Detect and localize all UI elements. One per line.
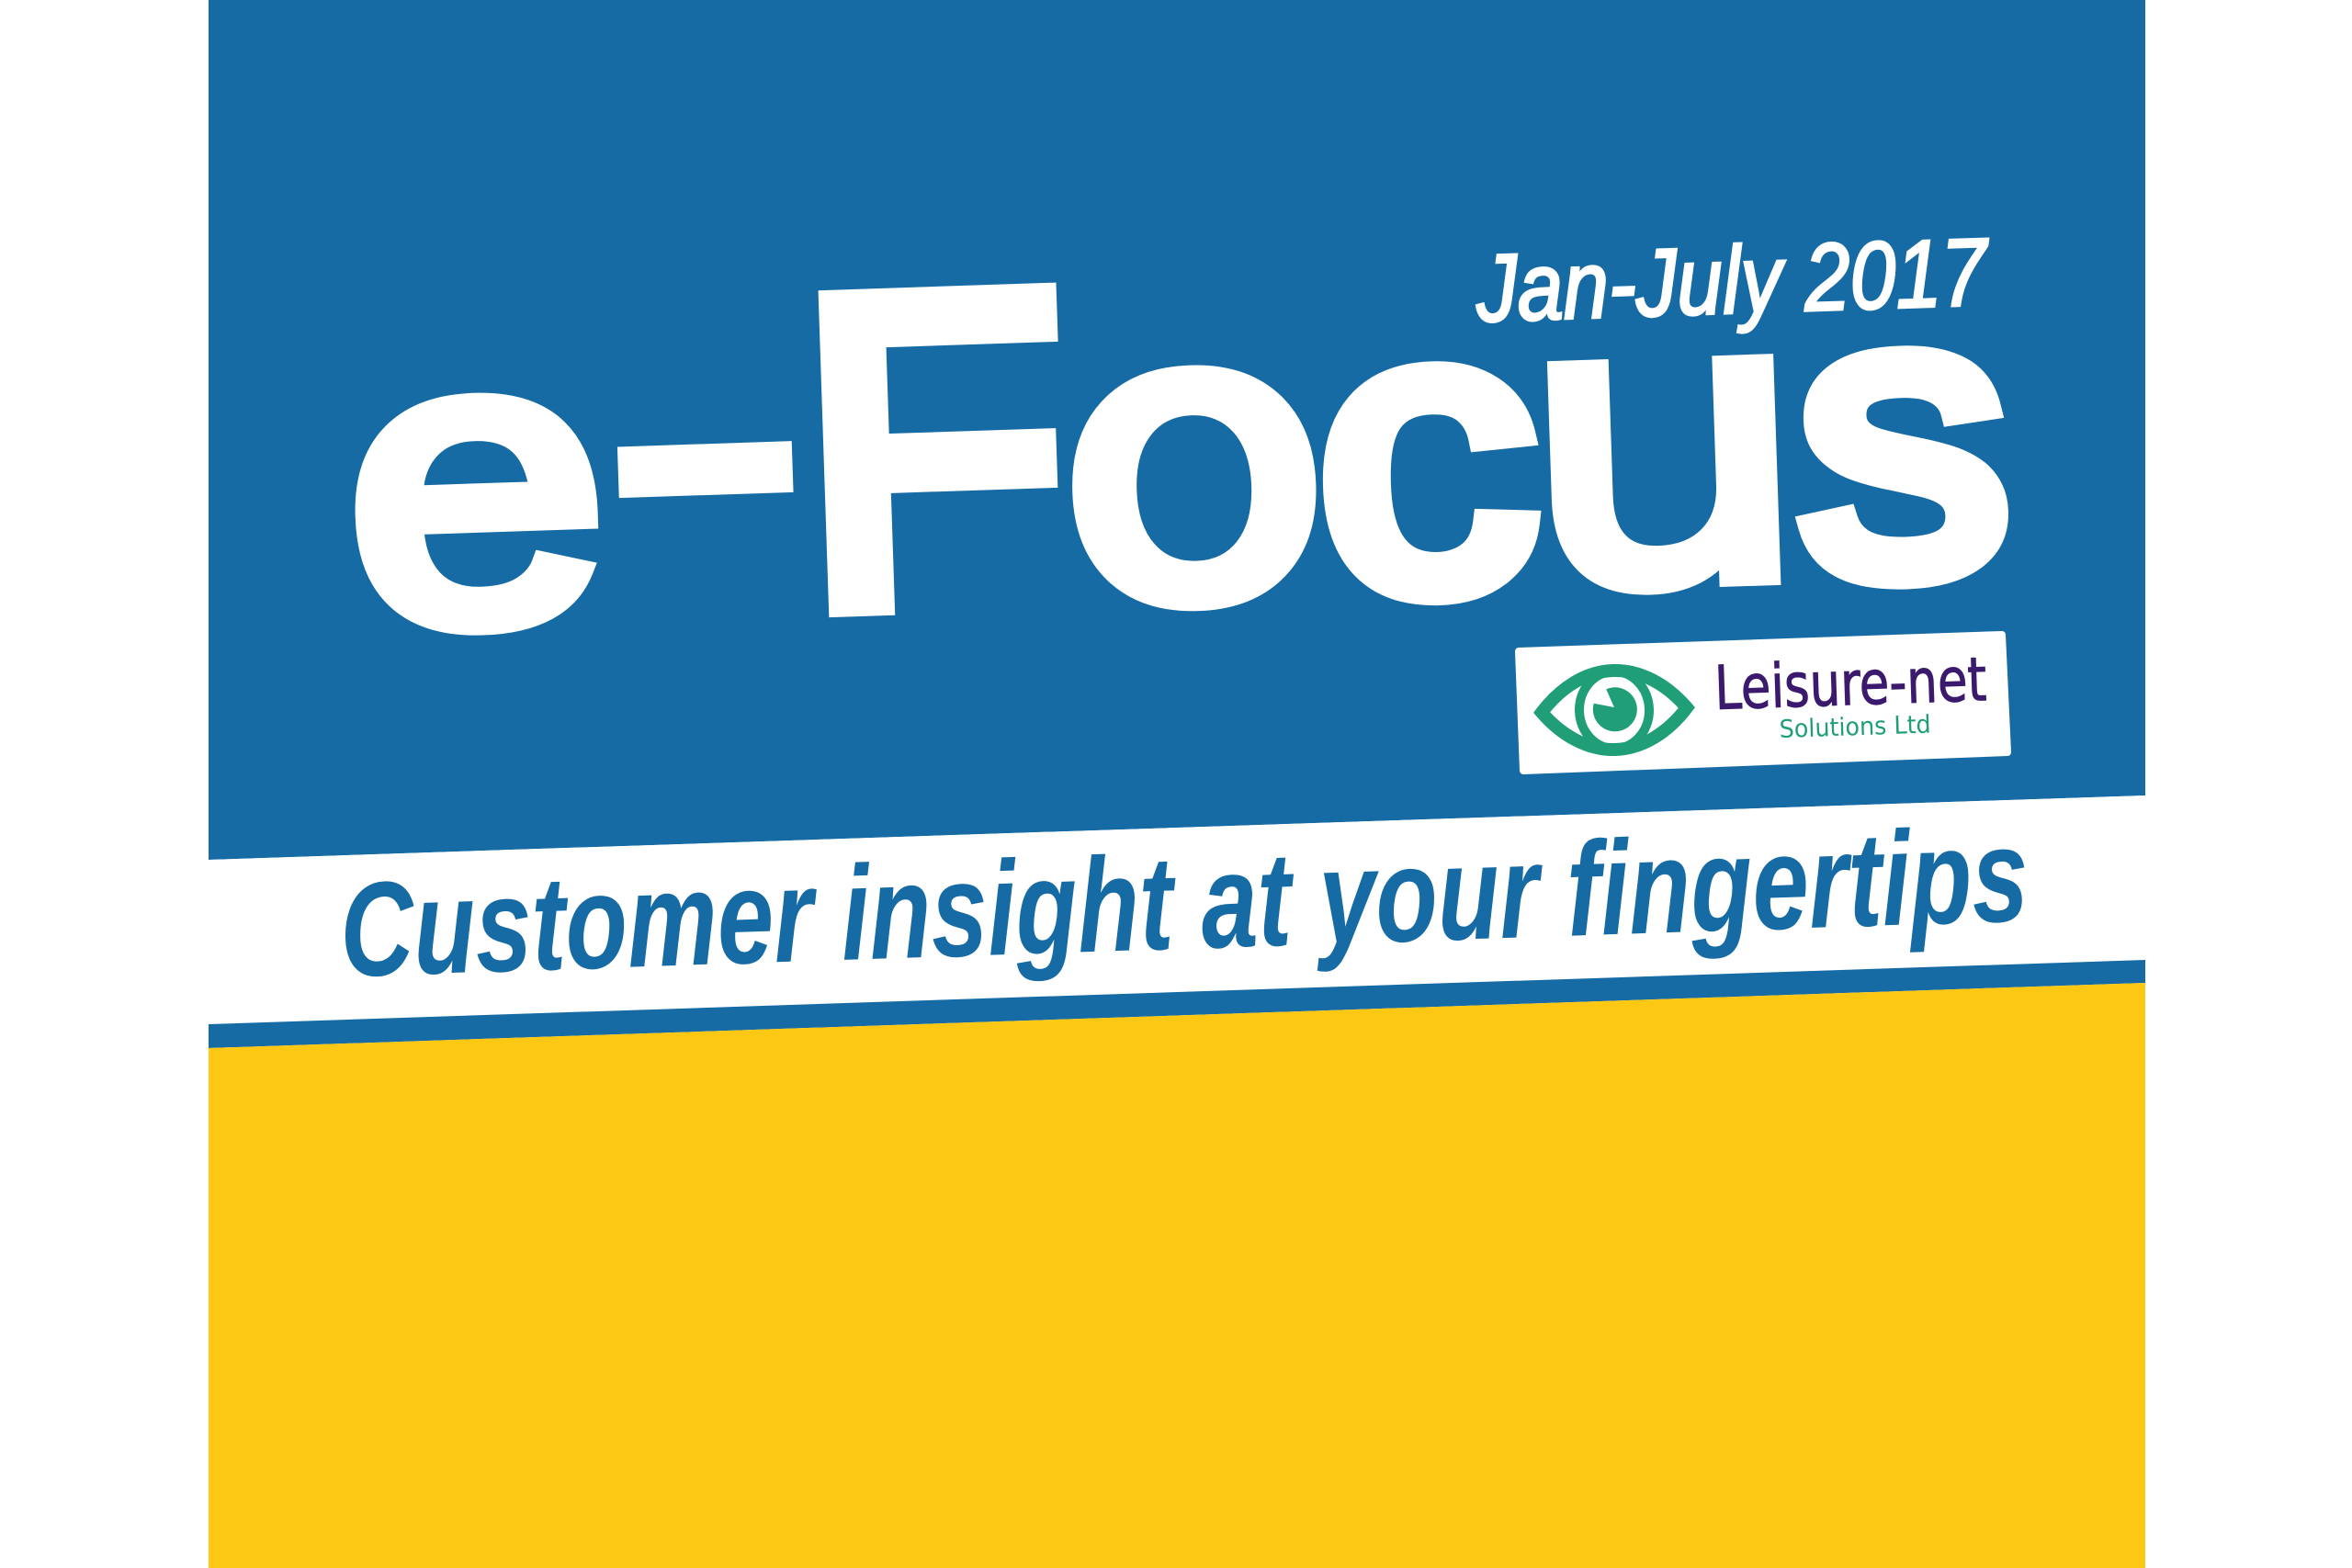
date heading: Jan-July 2017 (1474, 219, 1992, 343)
title: e-Focus: s (1790, 209, 2015, 660)
logo background (1519, 635, 2007, 771)
panel: yellow lower block (209, 983, 2145, 1568)
title: e-Focus: e (340, 254, 612, 711)
logo subtitle: Solutions Ltd (1779, 711, 1931, 744)
title: e-Focus: o (1051, 227, 1335, 694)
panel: white tagline strip (209, 795, 2145, 1024)
title: e-Focus: c (1310, 225, 1542, 678)
icon: green eye (1541, 668, 1688, 752)
logo wordmark: Leisure-net (1713, 644, 1987, 724)
title: e-Focus: F (793, 200, 1074, 698)
logo card: Leisure-net Solutions Ltd (1519, 635, 2007, 771)
title: e-Focus: - (597, 213, 811, 671)
title: e-Focus: u (1515, 214, 1814, 676)
title: e-Focus (340, 200, 2015, 711)
divider band: blue stripe (209, 960, 2145, 1048)
panel: blue header background (209, 0, 2145, 860)
